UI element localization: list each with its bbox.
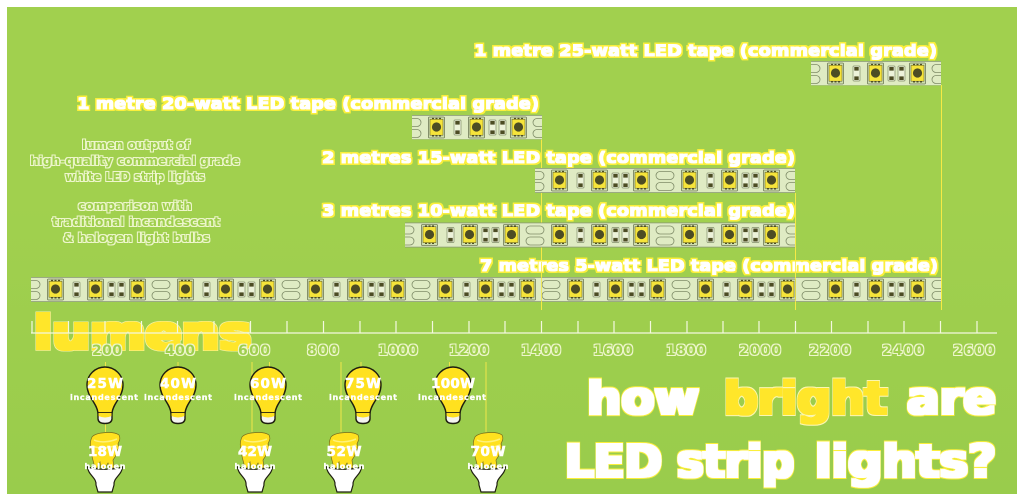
bulb: 52W halogen: halogen xyxy=(324,462,365,471)
bulb: 60W incandescent xyxy=(234,367,302,424)
title word: how: how xyxy=(587,372,699,425)
axis numbers: 1400 xyxy=(521,343,561,359)
label: 20-watt tape: 1 metre 20-watt LED tape (commercial grade) xyxy=(77,94,539,113)
bulb: 100W incandescent: incandescent xyxy=(418,393,486,402)
bulb: 18W halogen: halogen xyxy=(84,462,126,471)
bulb: 42W halogen xyxy=(234,433,276,492)
bulb: 75W incandescent: incandescent xyxy=(329,393,397,402)
bulb: 40W incandescent xyxy=(144,367,212,424)
axis numbers: 1600 xyxy=(593,343,633,359)
bulb: 25W incandescent xyxy=(70,367,138,424)
axis numbers: 2400 xyxy=(882,343,924,359)
axis numbers: 1200 xyxy=(449,343,489,359)
bulb: 42W halogen: 42W xyxy=(238,444,272,460)
description: white strip lights: white LED strip lights xyxy=(65,170,205,184)
title word: LED: LED xyxy=(565,435,662,488)
label: 25-watt tape: 1 metre 25-watt LED tape (commercial grade) xyxy=(474,41,937,60)
bulb: 75W incandescent: 75W xyxy=(345,376,381,392)
bulb: 52W halogen xyxy=(324,433,365,492)
axis numbers: 2600 xyxy=(953,343,995,359)
description: comparison: comparison with xyxy=(78,199,192,213)
bulb: 70W halogen: halogen xyxy=(468,462,509,471)
label: 5-watt tape: 7 metres 5-watt LED tape (commercial grade) xyxy=(480,256,938,275)
LED strip: 25-watt, 1 metre xyxy=(811,61,941,86)
bulb: 70W halogen: 70W xyxy=(470,444,506,460)
lumen axis xyxy=(31,321,997,359)
LED strip: 5-watt, 7 metres xyxy=(31,277,941,302)
bulb: 42W halogen: halogen xyxy=(234,462,276,471)
axis numbers: 1800 xyxy=(666,343,706,359)
LED strip: 20-watt, 1 metre xyxy=(412,115,542,140)
axis numbers: 2200 xyxy=(809,343,851,359)
bulb: 52W halogen: 52W xyxy=(326,444,362,460)
LED strip: 15-watt, 2 metres xyxy=(535,168,795,193)
bulb: 75W incandescent xyxy=(329,367,397,424)
bulb: 25W incandescent: incandescent xyxy=(70,393,138,402)
title xyxy=(565,372,996,488)
guide line overlays on strips xyxy=(542,205,796,302)
bulb: 100W incandescent: 100W xyxy=(431,376,475,392)
axis line and ticks xyxy=(31,321,997,333)
label: 15-watt tape: 2 metres 15-watt LED tape (commercial grade) xyxy=(322,148,795,167)
axis numbers: 400 xyxy=(165,343,195,359)
bulb: 18W halogen xyxy=(84,433,126,492)
description text block xyxy=(30,138,240,245)
axis numbers: 1000 xyxy=(378,343,418,359)
guide lines from strips down to the lumen axis xyxy=(542,85,942,310)
axis numbers: 200 xyxy=(92,343,122,359)
description: lumen output: lumen output of xyxy=(82,138,191,152)
axis numbers: 2000 xyxy=(739,343,781,359)
bulb guide lines xyxy=(106,362,486,432)
bulb: 40W incandescent: incandescent xyxy=(144,393,212,402)
heading: lumens: lumens xyxy=(34,306,251,360)
axis numbers xyxy=(92,343,995,359)
bulb: 40W incandescent: 40W xyxy=(160,376,196,392)
bulb: 100W incandescent xyxy=(418,367,486,424)
title word: are: are xyxy=(907,372,996,425)
axis numbers: 600 xyxy=(238,343,270,359)
bulb: 18W halogen: 18W xyxy=(88,444,122,460)
bulb: 60W incandescent: incandescent xyxy=(234,393,302,402)
title word: strip: strip xyxy=(677,435,794,488)
label: 10-watt tape: 3 metres 10-watt LED tape (commercial grade) xyxy=(322,201,795,220)
description: traditional bulbs: traditional incandescent xyxy=(52,215,220,229)
bulb: 60W incandescent: 60W xyxy=(250,376,286,392)
description: commercial grade: high-quality commercial grade xyxy=(30,154,240,168)
bulb: 70W halogen xyxy=(468,433,509,492)
title word: lights?: lights? xyxy=(815,435,996,488)
axis numbers: 800 xyxy=(307,343,339,359)
LED strip: 10-watt, 3 metres xyxy=(405,222,795,248)
bulb: 25W incandescent: 25W xyxy=(87,376,123,392)
description: halogen bulbs: & halogen light bulbs xyxy=(63,231,210,245)
title word: bright: bright xyxy=(724,372,887,425)
